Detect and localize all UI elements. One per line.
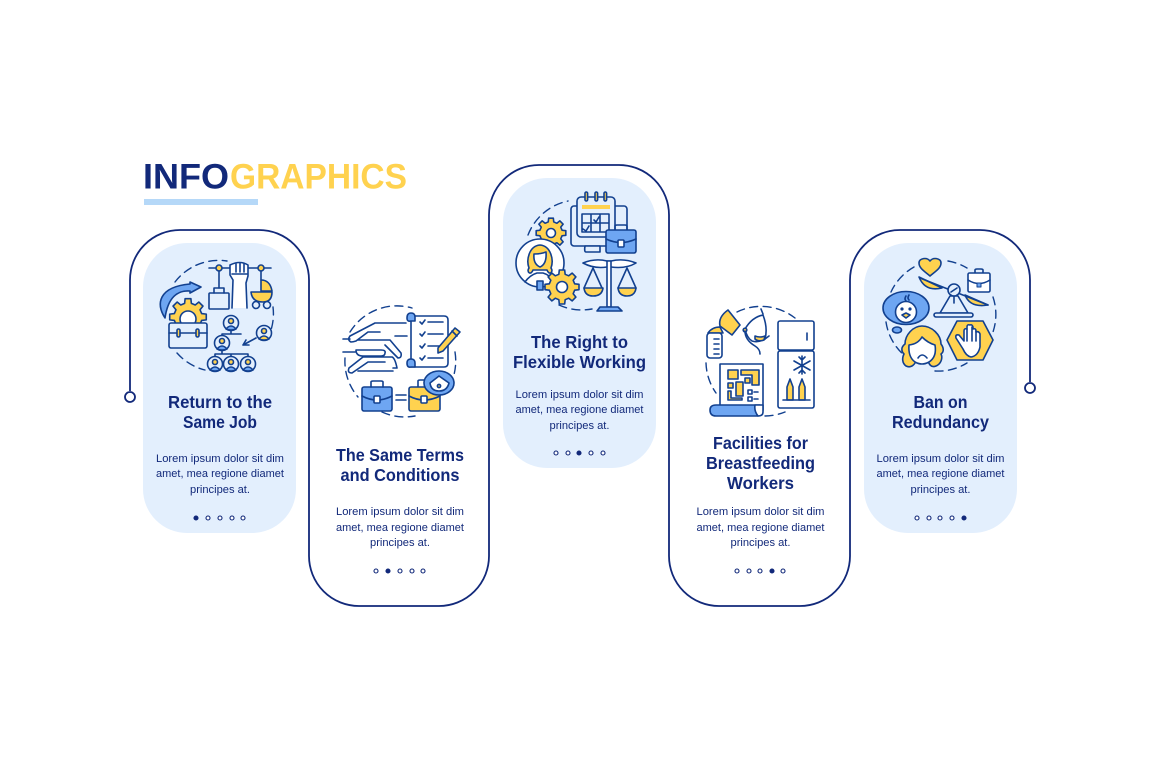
body text: amet, mea regione diamet — [336, 522, 464, 534]
title: GRAPHICS — [230, 158, 407, 196]
body text: amet, mea regione diamet — [156, 468, 284, 480]
heading — [513, 332, 646, 372]
icon: terms — [343, 306, 460, 417]
body text — [516, 389, 644, 432]
heading: Ban on — [914, 392, 968, 412]
heading: Redundancy — [892, 412, 989, 432]
icon: ban on redundancy — [883, 259, 996, 371]
panel: ban on redundancy — [864, 243, 1017, 533]
heading — [706, 433, 815, 493]
body text: Lorem ipsum dolor sit dim — [336, 506, 464, 518]
heading: Facilities for — [713, 433, 808, 453]
icon part: hands — [343, 323, 407, 373]
heading: Breastfeeding — [706, 453, 815, 473]
heading: Same Job — [183, 412, 257, 432]
heading: The Right to — [531, 332, 628, 352]
body text: Lorem ipsum dolor sit dim — [876, 453, 1005, 465]
panel: facilities for breastfeeding workers — [696, 306, 825, 573]
title: INFO — [143, 158, 229, 196]
heading: Flexible Working — [513, 352, 646, 372]
icon: flexible working — [516, 192, 636, 311]
heading: Workers — [727, 473, 794, 493]
body text — [876, 453, 1005, 496]
body text: Lorem ipsum dolor sit dim — [156, 453, 284, 465]
pagination dots — [554, 451, 605, 455]
heading — [336, 445, 464, 485]
body text: principes at. — [190, 484, 250, 496]
body text: principes at. — [730, 537, 790, 549]
body text: Lorem ipsum dolor sit dim — [696, 506, 825, 518]
body text: principes at. — [910, 484, 970, 496]
heading: and Conditions — [340, 465, 460, 485]
start node — [125, 392, 135, 402]
icon: breastfeeding facilities — [706, 306, 814, 416]
connecting outline — [130, 165, 1030, 606]
pagination dots — [374, 569, 425, 573]
heading: Return to the — [168, 392, 272, 412]
body text — [156, 453, 284, 496]
body text: principes at. — [370, 537, 430, 549]
panel: the same terms and conditions — [336, 306, 464, 573]
title — [143, 158, 407, 205]
heading: The Same Terms — [336, 445, 464, 465]
pagination dots — [915, 516, 966, 520]
heading — [892, 392, 989, 432]
body text: Lorem ipsum dolor sit dim — [516, 389, 644, 401]
panel: the right to flexible working — [503, 178, 656, 468]
body text: amet, mea regione diamet — [876, 468, 1004, 480]
panel: return to the same job — [143, 243, 296, 533]
end node — [1025, 383, 1035, 393]
body text: amet, mea regione diamet — [696, 522, 824, 534]
body text: amet, mea regione diamet — [516, 404, 644, 416]
body text — [696, 506, 825, 549]
icon: return to job — [160, 260, 273, 372]
pagination dots — [735, 569, 785, 573]
body text — [336, 506, 464, 549]
pagination dots — [194, 516, 245, 520]
body text: principes at. — [550, 420, 610, 432]
heading — [168, 392, 272, 432]
